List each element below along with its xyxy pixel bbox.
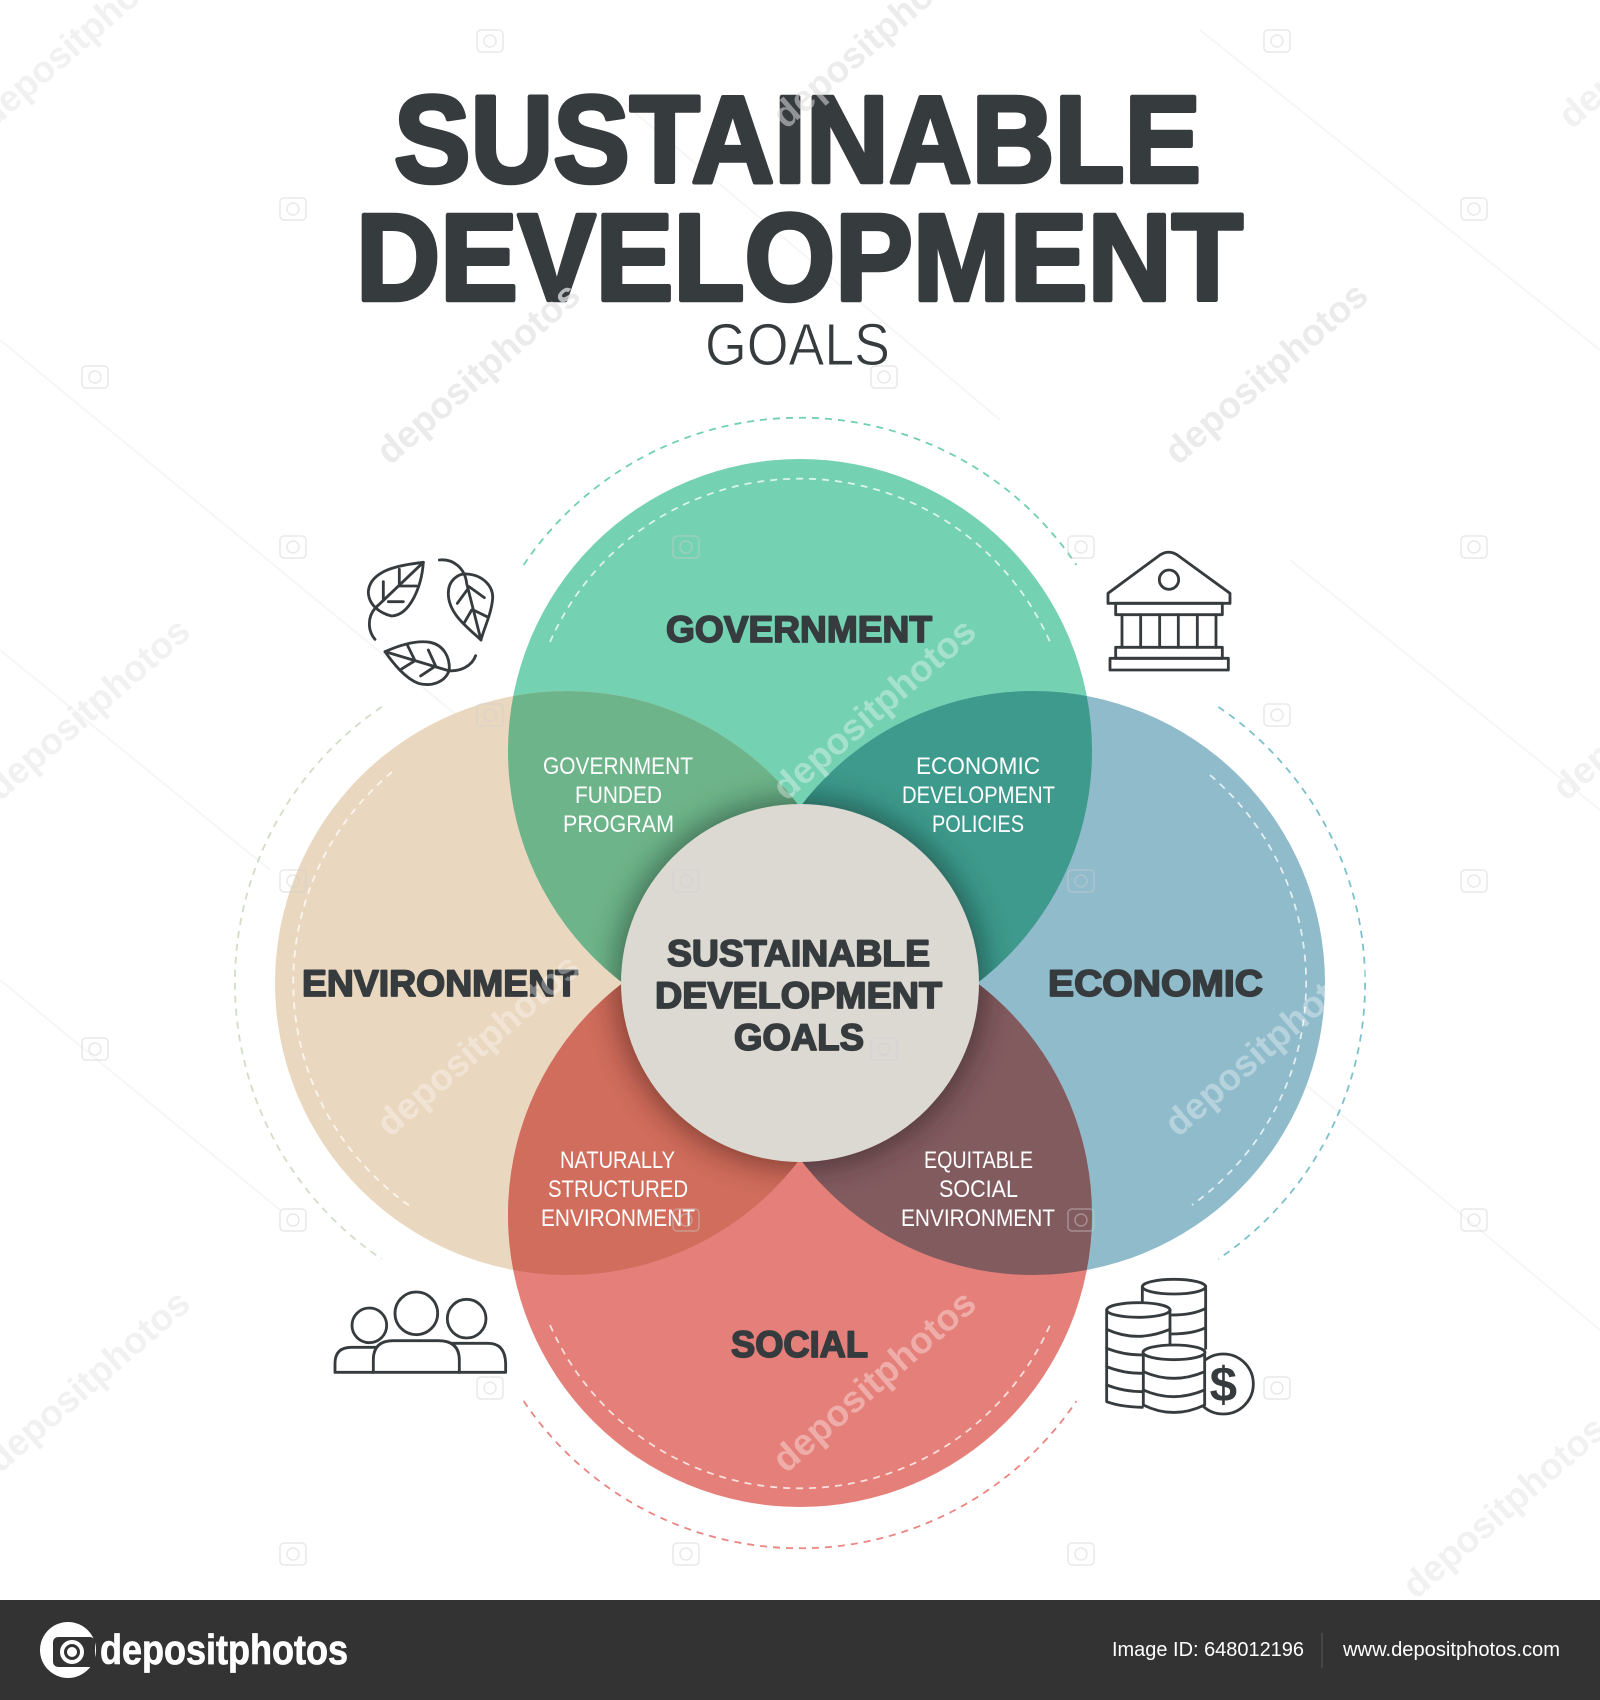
- center circle: [621, 804, 979, 1162]
- center label: [655, 933, 942, 1058]
- watermarks: depositphotos: [368, 946, 588, 1144]
- text: government funded program: FUNDED: [575, 782, 662, 809]
- text: equitable social environment: ENVIRONMENT: [901, 1205, 1055, 1232]
- watermark camera marks: [82, 30, 1487, 1565]
- overlap: economic and social: [802, 984, 1092, 1275]
- text: naturally structured environment: STRUCTURED: [548, 1176, 688, 1203]
- icon: government building: [1108, 552, 1230, 670]
- title: [356, 72, 1243, 378]
- panel: environment circle: [275, 691, 859, 1275]
- label: economic: ECONOMIC: [1048, 963, 1263, 1004]
- title: DEVELOPMENT: [356, 190, 1243, 327]
- footer logo: [40, 1622, 348, 1678]
- text: economic development policies: ECONOMIC: [916, 753, 1040, 780]
- text: naturally structured environment: [541, 1147, 695, 1232]
- text: naturally structured environment: ENVIRONMENT: [541, 1205, 695, 1232]
- label: social: SOCIAL: [731, 1324, 868, 1365]
- outer dashed ring: environment: [235, 707, 382, 1259]
- text: equitable social environment: EQUITABLE: [924, 1147, 1033, 1174]
- icon: coin stacks with dollar: $: [1210, 1357, 1237, 1412]
- label: environment: ENVIRONMENT: [302, 963, 578, 1004]
- watermarks: depositphotos: [764, 610, 984, 808]
- center label: GOALS: [734, 1017, 864, 1058]
- icon: recycling leaves: [368, 560, 493, 685]
- text: economic development policies: DEVELOPMENT: [902, 782, 1055, 809]
- text: government funded program: GOVERNMENT: [543, 753, 693, 780]
- footer bar: [0, 1600, 1600, 1700]
- text: equitable social environment: SOCIAL: [939, 1176, 1018, 1203]
- icon: coin stacks with dollar: [1107, 1279, 1253, 1414]
- label: government: GOVERNMENT: [666, 609, 932, 650]
- footer website: www.depositphotos.com: [1342, 1639, 1560, 1661]
- center label: SUSTAINABLE: [667, 933, 930, 974]
- overlap: environment and social: [508, 984, 798, 1275]
- text: government funded program: [543, 753, 693, 838]
- title: SUSTAINABLE: [394, 72, 1201, 209]
- text: government funded program: PROGRAM: [563, 811, 674, 838]
- icon: people group: [335, 1292, 506, 1372]
- watermarks: depositphotos: [368, 274, 588, 472]
- footer logo: depositphotos: [100, 1626, 348, 1673]
- outer dashed ring: social: [524, 1401, 1076, 1548]
- watermarks: depositphotos: [1156, 946, 1376, 1144]
- center label: DEVELOPMENT: [655, 975, 942, 1016]
- outer dashed ring: economic: [1218, 707, 1365, 1259]
- inner dashed arcs: [293, 479, 1306, 1488]
- text: equitable social environment: [901, 1147, 1055, 1232]
- footer image id: Image ID: 648012196: [1112, 1639, 1304, 1661]
- outer dashed ring: government: [524, 418, 1076, 565]
- watermarks: depositphotos: [764, 1282, 984, 1480]
- panel: economic circle: [741, 691, 1325, 1275]
- text: naturally structured environment: NATURALLY: [560, 1147, 675, 1174]
- panel: government circle: [508, 459, 1092, 1043]
- overlap: government and environment: [508, 691, 798, 982]
- text: economic development policies: [902, 753, 1055, 838]
- watermarks: depositphotos: [1156, 274, 1376, 472]
- text: economic development policies: POLICIES: [932, 811, 1024, 838]
- panel: social circle: [508, 923, 1092, 1507]
- overlap: government and economic: [802, 691, 1092, 982]
- title: GOALS: [705, 312, 890, 378]
